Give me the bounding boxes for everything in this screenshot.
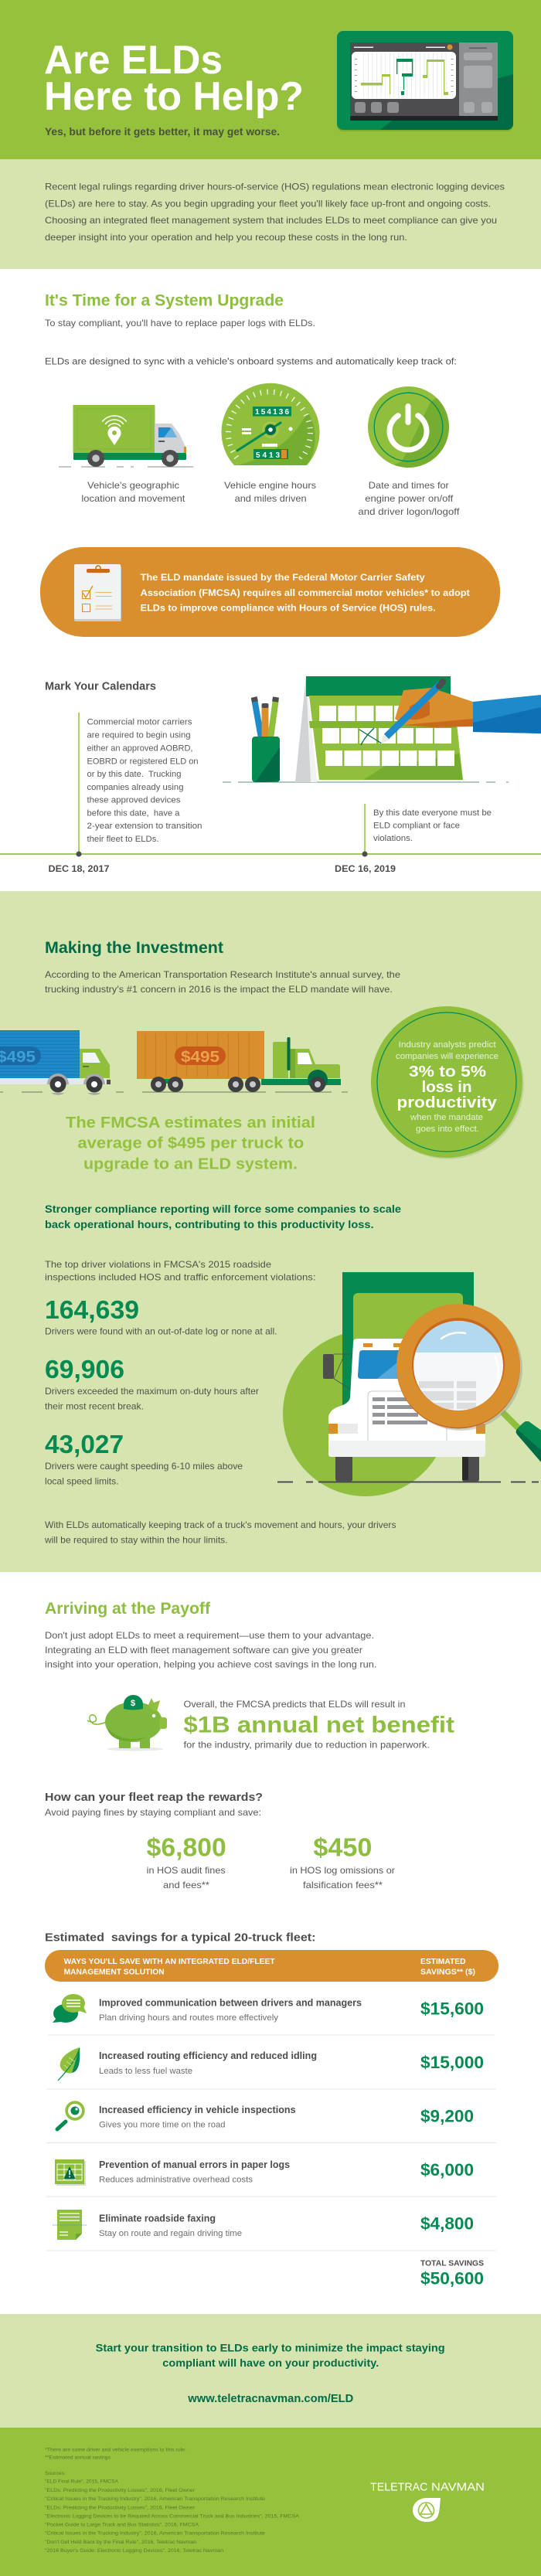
icon: clipboard: [74, 564, 121, 621]
paragraph: Integrating an ELD with fleet management software can give you greater: [45, 1645, 362, 1656]
stat: 164,639: 164,639: [45, 1295, 139, 1324]
timeline text: Dec 2017: 2-year extension to transition: [87, 822, 202, 831]
row: manual errors: Reduces administrative overhead costs: [99, 2176, 253, 2185]
row: improved communication: Improved communication between drivers and managers: [99, 1998, 362, 2009]
stat: 43,027: Drivers were caught speeding 6-10 miles above: [45, 1461, 243, 1472]
caption: engine hours: Vehicle engine hours: [224, 480, 316, 491]
stat: $1B annual net benefit: Overall, the FMCSA predicts that ELDs will result in: [184, 1699, 405, 1710]
CTA text: [96, 2343, 445, 2369]
row: vehicle inspections: Gives you more time on the road: [99, 2121, 226, 2130]
icon: speech bubbles: [53, 1994, 87, 2023]
footnotes and sources: "ELD Final Rule", 2015, FMCSA: [45, 2479, 119, 2485]
timeline text: Dec 2017: Commercial motor carriers: [87, 718, 192, 727]
callout: FMCSA estimate: upgrade to an ELD system.: [83, 1156, 298, 1173]
date label: Dec 18 2017: DEC 18, 2017: [48, 863, 110, 874]
footnotes and sources: "Critical Issues in the Trucking Industry", 2016, American Transportation Research Institute: [45, 2496, 265, 2502]
callout: productivity loss circle: productivity: [396, 1094, 498, 1111]
timeline text: Dec 2017: these approved devices: [87, 796, 181, 805]
footnotes and sources: [45, 2448, 300, 2554]
stat: $1B annual net benefit: $1B annual net benefit: [184, 1713, 454, 1738]
icon: power button: [368, 386, 449, 468]
text: ELD sync: ELDs are designed to sync with a vehicle's onboard systems and automatically keep track of:: [45, 356, 457, 366]
callout: productivity loss circle: [371, 1006, 524, 1159]
intro paragraph: (ELDs) are here to stay. As you begin upgrading your fleet you'll likely face up-front and ongoing costs.: [45, 198, 491, 209]
table header bar: MANAGEMENT SOLUTION: [64, 1969, 165, 1977]
row: routing efficiency: Leads to less fuel waste: [99, 2067, 192, 2076]
intro paragraph: deeper insight into your operation and help you recoup these costs in the long run.: [45, 232, 407, 243]
row: manual errors: [46, 2142, 496, 2186]
caption: date and times: engine power on/off: [365, 493, 454, 504]
header background: [0, 0, 541, 159]
stat: $450: in HOS log omissions or: [290, 1865, 395, 1876]
row: improved communication: Plan driving hours and routes more effectively: [99, 2013, 279, 2023]
callout: ELD mandate: [40, 547, 500, 637]
total savings: $50,600: [420, 2269, 484, 2288]
callout: productivity loss circle: loss in: [422, 1079, 471, 1096]
CTA background: [0, 2314, 541, 2428]
logo: Teletrac Navman: TELETRAC: [370, 2482, 428, 2494]
callout text: Association (FMCSA) requires all commercial motor vehicles* to adopt: [141, 587, 470, 598]
intro text: [45, 969, 400, 995]
illustration: calendar and hand: [223, 676, 541, 782]
timeline text: Dec 2017: either an approved AOBRD,: [87, 744, 193, 753]
footnotes and sources: "Critical Issues in the Trucking Industry", 2016, American Transportation Research Institute: [45, 2531, 265, 2537]
CTA text: compliant will have on your productivity.: [162, 2357, 379, 2369]
table header bar: ESTIMATED: [420, 1958, 465, 1966]
icon: document: [53, 2210, 87, 2240]
text: compliance reporting: [45, 1203, 402, 1230]
subtitle: Yes, but before it gets better, it may get worse.: [45, 126, 280, 138]
row: routing efficiency: $15,000: [420, 2053, 484, 2072]
paragraph: [45, 1630, 376, 1670]
stat: 43,027: [45, 1430, 243, 1487]
footnotes and sources: *There are some driver and vehicle exemptions to this rule.: [45, 2448, 186, 2453]
text: top driver violations: The top driver violations in FMCSA's 2015 roadside: [45, 1259, 271, 1270]
icon: piggy bank: $: [131, 1699, 135, 1708]
website link: www.teletracnavman.com/ELD: [187, 2393, 353, 2405]
icon: green truck with location pin: [59, 405, 193, 467]
icon: piggy bank: [87, 1695, 167, 1751]
callout: productivity loss circle: goes into effect.: [416, 1125, 479, 1134]
callout pill: [40, 547, 500, 637]
table heading: Estimated savings for a typical 20-truck fleet:: [45, 1931, 315, 1945]
callout text: The ELD mandate issued by the Federal Motor Carrier Safety: [141, 572, 425, 583]
total savings: [46, 2251, 496, 2288]
section: footer: [0, 2428, 541, 2576]
stat: $450: [290, 1833, 395, 1890]
text: closing statement: With ELDs automatically keeping track of a truck's movement and hours, your drivers: [45, 1519, 396, 1530]
footnotes and sources: "ELDs: Predicting the Productivity Losses", 2016, Fleet Owner: [45, 2488, 196, 2493]
stat: 69,906: [45, 1355, 259, 1412]
stat: 69,906: Drivers exceeded the maximum on-duty hours after: [45, 1386, 259, 1397]
section: header: [0, 0, 541, 159]
icon: log with warning: [55, 2159, 86, 2186]
investment background: [0, 891, 541, 1572]
icon: odometer gauge: 154136: [255, 408, 289, 417]
icon: odometer gauge: 5413: [256, 451, 280, 460]
stat: $1B annual net benefit: [184, 1699, 454, 1751]
illustration: orange truck: $495: [181, 1049, 219, 1066]
subheading: Mark Your Calendars: [45, 681, 156, 693]
stat: $450: falsification fees**: [303, 1880, 383, 1890]
stat: 43,027: 43,027: [45, 1430, 124, 1458]
table header bar: SAVINGS** ($): [420, 1969, 475, 1977]
stat: $1B annual net benefit: for the industry, primarily due to reduction in paperwork.: [184, 1740, 430, 1751]
subheading: reap the rewards: How can your fleet reap the rewards?: [45, 1791, 263, 1804]
logo: Teletrac Navman: [370, 2482, 485, 2522]
callout: productivity loss circle: companies will experience: [396, 1052, 498, 1061]
footnotes and sources: **Estimated annual savings: [45, 2455, 111, 2461]
section: call to action: [0, 2314, 541, 2428]
heading: Making the Investment: [45, 939, 223, 957]
text: top driver violations: [45, 1259, 315, 1283]
footnotes and sources: "ELDs: Predicting the Productivity Losses", 2016, Fleet Owner: [45, 2505, 196, 2510]
caption: engine hours: and miles driven: [235, 493, 307, 504]
illustration: truck under magnifying glass: [277, 1272, 541, 1496]
footnotes and sources: "2016 Buyer's Guide: Electronic Logging Devices", 2016, Teletrac Navman: [45, 2548, 223, 2554]
stat: 69,906: their most recent break.: [45, 1401, 144, 1412]
intro paragraph: [45, 181, 505, 243]
timeline text: Dec 2019: violations.: [373, 834, 413, 843]
text: avoid fines: Avoid paying fines by staying compliant and save:: [45, 1807, 261, 1818]
caption: date and times: [358, 480, 460, 517]
callout: productivity loss circle: when the mandate: [410, 1113, 483, 1122]
timeline text: Dec 2017: their fleet to ELDs.: [87, 835, 159, 844]
timeline text: Dec 2019: By this date everyone must be: [373, 808, 492, 818]
caption: date and times: and driver logon/logoff: [358, 506, 460, 517]
row: vehicle inspections: [46, 2088, 496, 2130]
section: mark your calendars: [0, 676, 541, 874]
row: roadside faxing: [46, 2197, 496, 2240]
stat: $6,800: $6,800: [147, 1833, 226, 1862]
stat: 164,639: Drivers were found with an out-of-date log or none at all.: [45, 1326, 277, 1337]
title: Are ELDs: [44, 38, 223, 83]
intro paragraph: Recent legal rulings regarding driver hours-of-service (HOS) regulations mean electronic logging devices: [45, 181, 505, 192]
title: Here to Help?: [44, 74, 304, 119]
heading: It's Time for a System Upgrade: [45, 292, 284, 309]
callout: FMCSA estimate: average of $495 per truck to: [77, 1135, 304, 1152]
callout: FMCSA estimate: [66, 1114, 315, 1173]
text: compliance reporting: Stronger compliance reporting will force some companies to scale: [45, 1203, 402, 1215]
section: system upgrade: [45, 292, 460, 517]
paragraph: insight into your operation, helping you achieve cost savings in the long run.: [45, 1659, 376, 1670]
icon: magnifier with eye: [57, 2101, 85, 2129]
icon: odometer gauge: [221, 383, 320, 474]
stat: $6,800: and fees**: [163, 1880, 209, 1890]
table header bar: WAYS YOU'LL SAVE WITH AN INTEGRATED ELD/FLEET: [64, 1958, 275, 1966]
timeline text: Dec 2017: or by this date. Trucking: [87, 770, 181, 779]
heading: Arriving at the Payoff: [45, 1600, 211, 1618]
text: closing statement: [44, 1519, 396, 1546]
CTA text: Start your transition to ELDs early to minimize the impact staying: [96, 2343, 445, 2354]
timeline text: Dec 2017: EOBRD or registered ELD on: [87, 757, 198, 766]
footer background: [0, 2428, 541, 2576]
text: compliance reporting: back operational hours, contributing to this productivity loss.: [45, 1219, 374, 1230]
row: improved communication: [53, 1994, 484, 2023]
title: [44, 38, 304, 119]
paragraph: Don't just adopt ELDs to meet a requirement—use them to your advantage.: [45, 1630, 374, 1641]
logo: Teletrac Navman: NAVMAN: [431, 2482, 485, 2494]
timeline: [0, 713, 541, 856]
date label: Dec 16 2019: DEC 16, 2019: [335, 863, 396, 874]
callout text: ELDs to improve compliance with Hours of Service (HOS) rules.: [141, 603, 436, 614]
row: improved communication: $15,600: [420, 1999, 484, 2019]
icon: leaf: [58, 2047, 80, 2081]
text: closing statement: will be required to stay within the hour limits.: [44, 1535, 228, 1546]
intro paragraph: Choosing an integrated fleet management system that includes ELDs to meet compliance can give you: [45, 215, 497, 226]
row: routing efficiency: [48, 2034, 495, 2081]
timeline text: Dec 2017: are required to begin using: [87, 731, 190, 740]
illustration: blue truck: [0, 1030, 124, 1095]
stat: 43,027: local speed limits.: [45, 1476, 119, 1487]
stat: $450: $450: [313, 1833, 372, 1862]
row: vehicle inspections: $9,200: [420, 2107, 474, 2126]
intro background: [0, 159, 541, 269]
section: making the investment: [0, 891, 541, 1572]
caption: location: Vehicle's geographic: [87, 480, 179, 491]
timeline text: Dec 2017: companies already using: [87, 783, 184, 792]
intro text: trucking industry's #1 concern in 2016 is the impact the ELD mandate will have.: [45, 984, 393, 995]
row: roadside faxing: Eliminate roadside faxing: [99, 2214, 216, 2224]
callout: productivity loss circle: 3% to 5%: [409, 1063, 486, 1080]
timeline text: Dec 2017: [87, 718, 202, 844]
caption: engine hours: [224, 480, 316, 504]
callout: FMCSA estimate: The FMCSA estimates an initial: [66, 1114, 315, 1131]
text: top driver violations: inspections included HOS and traffic enforcement violations:: [45, 1272, 315, 1283]
footnotes and sources: "Pocket Guide to Large Truck and Bus Statistics", 2016, FMCSA: [45, 2523, 199, 2528]
footnotes and sources: "Electronic Logging Devices to be Required Across Commercial Truck and Bus Industries", 2015, FMCSA: [45, 2513, 300, 2519]
section: intro: [0, 159, 541, 269]
row: roadside faxing: $4,800: [420, 2214, 474, 2234]
section: savings table: [45, 1931, 498, 2288]
caption: date and times: Date and times for: [369, 480, 449, 491]
illustration: orange truck: [137, 1031, 348, 1092]
stat: 69,906: 69,906: [45, 1355, 124, 1383]
row: routing efficiency: Increased routing efficiency and reduced idling: [99, 2050, 317, 2061]
stat: $6,800: [147, 1833, 226, 1890]
stat: $6,800: in HOS audit fines: [147, 1865, 226, 1876]
caption: location: location and movement: [81, 493, 185, 504]
footnotes and sources: Sources:: [45, 2471, 66, 2476]
callout text: [141, 572, 470, 614]
text: replace paper logs: To stay compliant, you'll have to replace paper logs with ELDs.: [45, 318, 315, 328]
table header bar: [45, 1950, 498, 1982]
stat: 164,639: [45, 1295, 277, 1337]
timeline text: Dec 2017: before this date, have a: [87, 808, 180, 818]
callout: productivity loss circle: Industry analysts predict: [399, 1040, 496, 1050]
intro text: According to the American Transportation Research Institute's annual survey, the: [45, 969, 400, 980]
footnotes and sources: "Don't Get Held Back by the Final Rule", 2016, Teletrac Navman: [45, 2540, 196, 2545]
row: manual errors: Prevention of manual errors in paper logs: [99, 2159, 290, 2170]
row: roadside faxing: Stay on route and regain driving time: [99, 2229, 242, 2238]
total savings: TOTAL SAVINGS: [420, 2259, 484, 2268]
caption: location: [81, 480, 185, 504]
timeline text: Dec 2019: [373, 808, 492, 843]
section: arriving at the payoff: [45, 1600, 454, 1890]
icon: ELD tablet: [337, 31, 513, 131]
timeline text: Dec 2019: ELD compliant or face: [373, 822, 460, 831]
row: manual errors: $6,000: [420, 2160, 474, 2180]
row: vehicle inspections: Increased efficiency in vehicle inspections: [99, 2105, 296, 2115]
